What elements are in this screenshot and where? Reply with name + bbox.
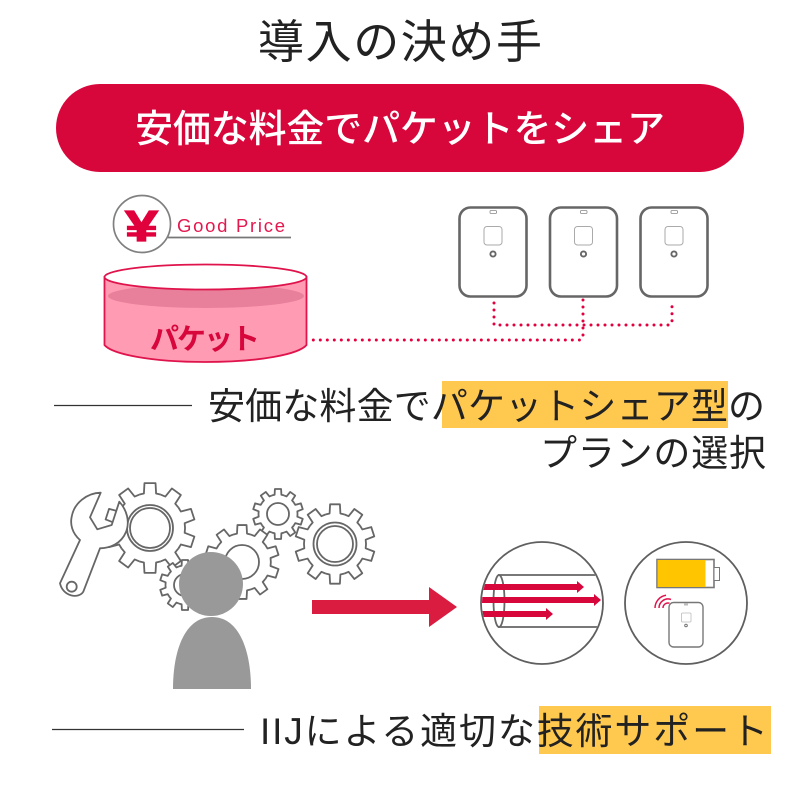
caption: packet share plan: プランの選択 [540, 433, 766, 474]
title: 導入の決め手 [258, 16, 542, 68]
caption: packet share plan [54, 381, 766, 474]
gear small left [159, 560, 211, 610]
caption: packet share plan: 安価な料金でパケットシェア型の [208, 386, 765, 427]
caption: IIJ support: IIJによる適切な技術サポート [260, 711, 768, 752]
arrow [312, 587, 457, 627]
icon: good price yen badge [114, 196, 291, 252]
banner [56, 84, 744, 172]
wifi signal [655, 595, 671, 608]
good price label: Good Price [177, 215, 285, 236]
wrench [60, 493, 128, 596]
gear large [104, 483, 196, 573]
banner text: 安価な料金でパケットをシェア [135, 109, 665, 151]
yen symbol: ¥ [125, 202, 158, 251]
icon: gears and wrench [60, 483, 376, 610]
gear middle [204, 525, 280, 599]
gear right [294, 504, 376, 584]
gear small top [252, 489, 304, 539]
caption: IIJ support [52, 706, 771, 754]
icon: packet cylinder [104, 264, 306, 362]
small router [669, 602, 703, 647]
icon: tube with arrows [480, 542, 610, 664]
cylinder label: パケット [150, 324, 260, 356]
icon: person [173, 552, 251, 689]
devices: three routers [460, 208, 708, 296]
connection: dotted lines [312, 300, 672, 340]
icon: battery and router [625, 542, 747, 664]
battery [657, 560, 720, 588]
